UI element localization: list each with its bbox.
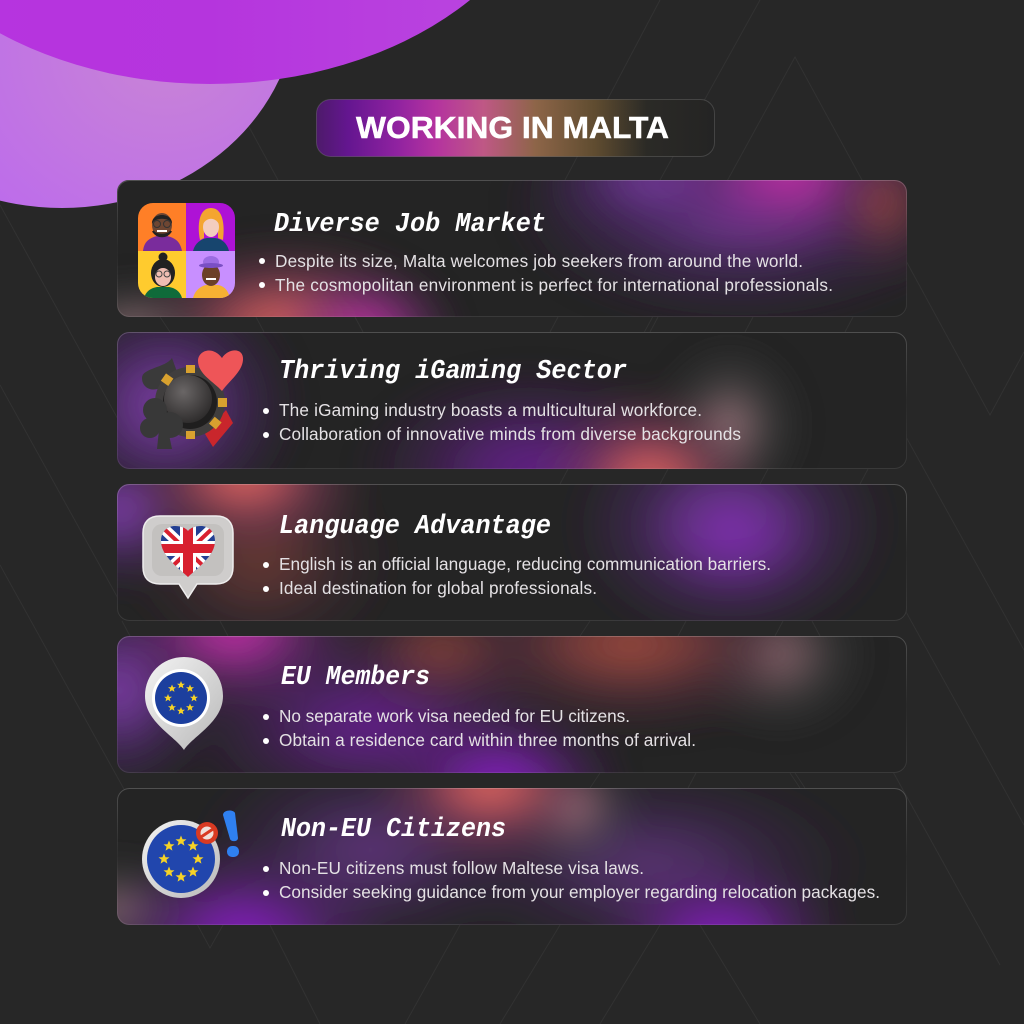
bullet list: The iGaming industry boasts a multicultural workforce. <box>279 400 702 420</box>
heading: EU Members <box>281 663 430 693</box>
bullet list <box>263 400 741 444</box>
panel: diverse job market <box>117 180 907 317</box>
title: WORKING IN MALTA <box>356 111 669 145</box>
panel: language advantage <box>117 484 907 621</box>
card 4 glow <box>117 636 848 773</box>
decorative blob: light purple <box>0 0 297 208</box>
bullet list: The cosmopolitan environment is perfect for international professionals. <box>275 275 833 295</box>
card 3 glow <box>117 484 874 621</box>
icon: casino chip with card suits <box>140 350 243 449</box>
title banner <box>316 100 714 156</box>
card 2 glow <box>117 332 789 469</box>
heading: Non-EU Citizens <box>281 815 506 845</box>
bullet list: Obtain a residence card within three months of arrival. <box>279 730 696 750</box>
heading: Thriving iGaming Sector <box>279 357 627 387</box>
bullet list: Despite its size, Malta welcomes job seekers from around the world. <box>275 251 803 271</box>
bullet list: No separate work visa needed for EU citizens. <box>279 706 630 726</box>
card 1 glow <box>117 180 907 317</box>
panel: non-EU citizens <box>117 788 907 925</box>
bullet list: English is an official language, reducing communication barriers. <box>279 554 771 574</box>
decorative blob: magenta <box>0 0 560 84</box>
bullet list <box>263 706 696 750</box>
bullet list <box>259 251 833 295</box>
icon: four avatars <box>138 203 235 298</box>
bullet list: Collaboration of innovative minds from diverse backgrounds <box>279 424 741 444</box>
bullet list <box>263 554 771 598</box>
panel: EU members <box>117 636 907 925</box>
icon: EU flag map pin <box>145 657 223 750</box>
bullet list: Ideal destination for global professionals. <box>279 578 597 598</box>
bullet list <box>263 858 880 902</box>
panel: thriving iGaming sector <box>117 332 907 484</box>
heading: Diverse Job Market <box>274 210 546 240</box>
icon: EU flag with prohibition badge and exclamation mark <box>142 811 239 898</box>
heading: Language Advantage <box>279 512 551 542</box>
bullet list: Consider seeking guidance from your employer regarding relocation packages. <box>279 882 880 902</box>
icon: UK flag heart in speech bubble <box>143 516 233 598</box>
bullet list: Non-EU citizens must follow Maltese visa laws. <box>279 858 644 878</box>
card 5 glow <box>117 788 838 925</box>
